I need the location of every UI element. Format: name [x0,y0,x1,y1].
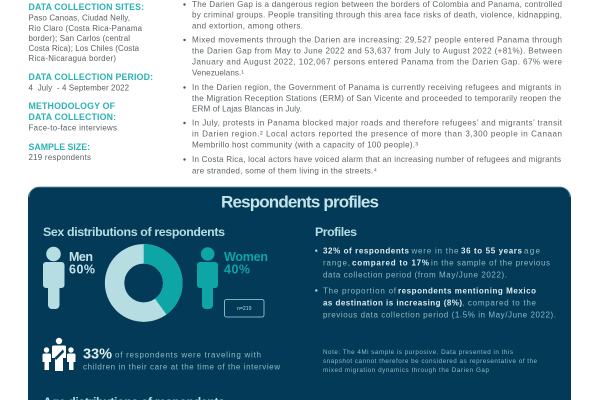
note: sample caveat: Note: The 4Mi sample is purposive. Data presented in this [323,349,513,356]
label: men 60%: Men [69,250,93,264]
heading: methodology: METHODOLOGY OF [28,101,116,111]
bullet: age range finding: 32% of respondents [323,246,410,256]
bullet: government response: ERM of Lajas Blancas in July. [192,104,302,114]
bullet: mixed movements: January and August 2022, 102,067 persons entered Panama from the Darien Gap. 67% were [192,58,562,66]
stat: 33% travelling with children [83,346,280,372]
bullet: Mexico destination finding: previous data collection period (1.5% in May/June 2022). [323,310,556,320]
stat: 33% travelling with children: 33% [83,346,112,362]
bullet: Mexico destination finding: The proportion of [323,286,397,296]
note: sample caveat: mixed migration dynamics through the Darien Gap [323,367,489,374]
bullet: mixed movements: Venezuelans.¹ [192,68,244,78]
panel: data collection details [28,2,153,162]
heading: respondents profiles: Respondents profiles [221,192,379,212]
bullet: age range finding: data collection period (from May/June 2022). [323,270,507,280]
heading: data collection sites: DATA COLLECTION SITES: [28,2,144,12]
bullet: age range finding [315,246,550,280]
text: profile findings [315,246,556,320]
donut chart: sex distribution [115,254,173,312]
bullet: government response [183,83,561,114]
bullet: age range finding: compared to 17% [352,258,429,268]
bullet: Costa Rica [183,155,561,176]
heading: methodology [28,101,116,122]
bullet: protests: In July, protests in Panama blocked major roads and therefore refugees’ and migrants’ transit [192,118,563,128]
note: sample caveat [323,349,537,374]
icon: man [43,247,64,309]
bullet: government response: the Migration Reception Stations (ERM) of San Vicente and proceeded to temporarily reopen the [192,94,561,103]
bullet: Mexico destination finding: as destination is increasing (8%) [323,298,462,308]
bullet: age range finding: in the sample of the previous [431,258,550,268]
legend: sample size box [224,300,264,317]
bullet: age range finding: were in the [410,246,459,256]
text: data collection sites list [28,14,143,63]
heading: profiles: Profiles [315,225,357,239]
bullet: protests [183,118,563,150]
bullet: age range finding: 36 to 55 years [461,246,523,256]
bullet: age range finding: range, [323,258,350,268]
panel: situation bullet list [183,0,563,176]
bullet: Darien Gap danger: and extortion, among others. [192,22,303,30]
heading: data collection period: DATA COLLECTION PERIOD: [28,72,153,82]
label: women 40%: 40% [224,262,250,276]
text: collection dates: 4 July - 4 September 2022 [28,84,129,92]
label: men 60% [69,250,95,276]
bullet: Darien Gap danger: by criminal groups. People transiting through this area face risks of death, violence, kidnapping, [192,10,562,20]
heading: sex distributions: Sex distributions of respondents [43,225,225,239]
text: data collection sites list: Costa Rica); Los Chiles (Costa [28,44,140,53]
bullet: mixed movements: Mixed movements through the Darien are increasing: 29,527 people entered Panama through [192,36,562,44]
stat: 33% travelling with children: children in their care at the time of the interview [83,362,280,372]
text: methodology detail: Face-to-face interviews [28,124,117,132]
text: sample size value: 219 respondents [28,153,91,162]
bullet: Mexico destination finding: respondents mentioning Mexico [398,286,536,296]
heading: sample size: SAMPLE SIZE: [28,142,90,152]
text: data collection sites list: Paso Canoas, Ciudad Nelly, [28,14,130,22]
panel: respondents profiles [28,187,571,400]
label: women 40%: Women [224,250,268,264]
label: women 40% [224,250,268,276]
bullet: age range finding: age [524,246,541,256]
text: data collection sites list: Rica-Nicaragua border) [28,54,116,63]
bullet: Mexico destination finding: , compared to the [462,298,537,308]
bullet: Mexico destination finding [315,286,556,320]
bullet: protests: in Darien region.² Local actors reported the presence of more than 3,300 people in Canaan [192,130,562,138]
bullet: Darien Gap danger: The Darien Gap is a dangerous region between the borders of Colombia and Panama, controlled [192,0,562,9]
bullet: protests: Membrillo host community (with a capacity of 100 people).³ [192,140,418,150]
icon: woman [197,247,218,309]
bullet: mixed movements [183,36,562,78]
bullet: mixed movements: the Darien Gap from May to June 2022 and 53,637 from July to August 2022 (+81%). Between [192,46,562,56]
bullet: Costa Rica: are stranded, some of them living in the streets.⁴ [192,166,378,176]
bullet: government response: In the Darien region, the Government of Panama is currently receiving refugees and migrants in [192,83,561,92]
bullet: Costa Rica: In Costa Rica, local actors have voiced alarm that an increasing number of refugees and migrants [192,155,561,164]
legend: sample size box: n=219 [237,306,252,312]
text: data collection sites list: border); San Carlos (central [28,34,130,43]
icon: family with children [42,338,76,371]
note: sample caveat: snapshot cannot therefore be considered as representative of the [323,358,537,365]
label: men 60%: 60% [69,262,95,276]
stat: 33% travelling with children: of respondents were traveling with [115,350,261,360]
bullet: Darien Gap danger [183,0,562,30]
heading: methodology: DATA COLLECTION: [28,112,116,122]
text: data collection sites list: Rio Claro (Costa Rica-Panama [28,24,143,33]
